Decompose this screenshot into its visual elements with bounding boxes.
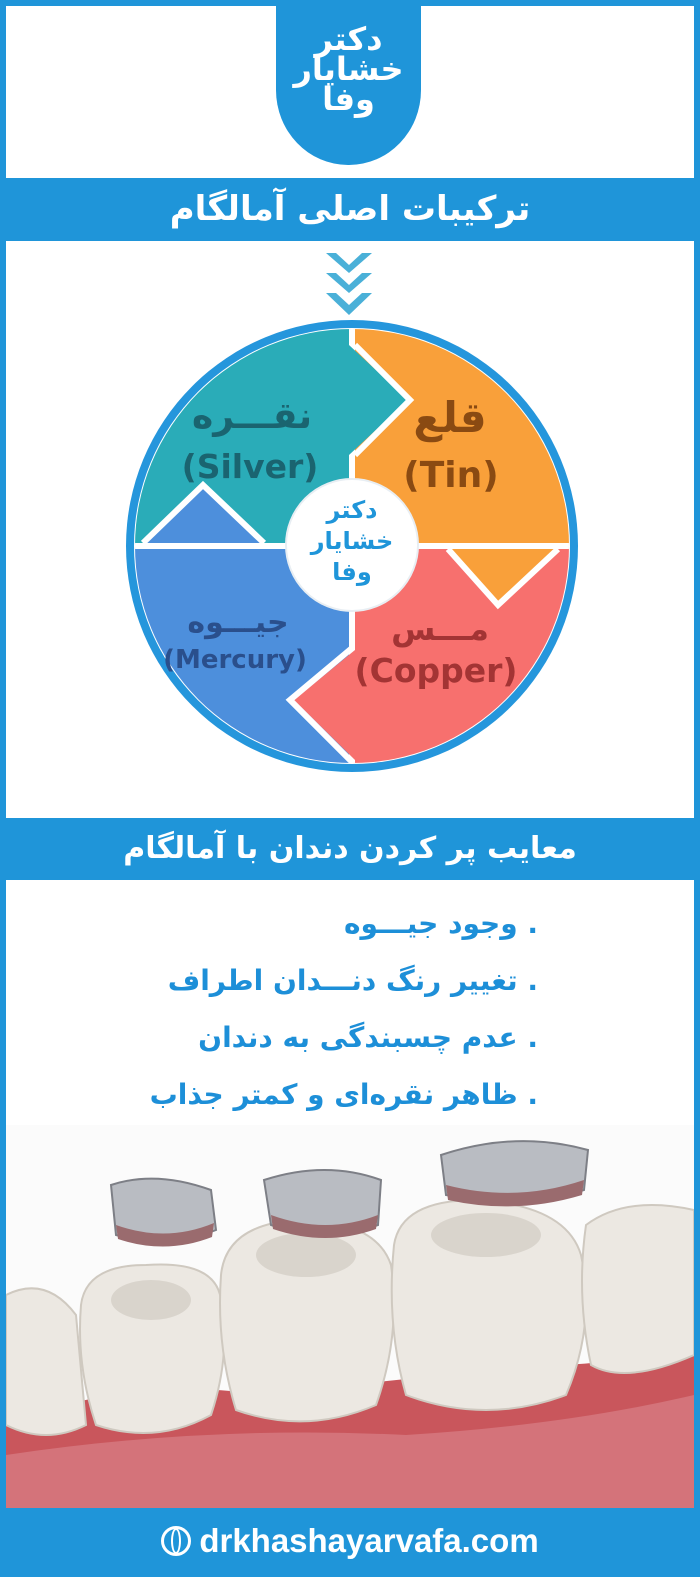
logo tab — [276, 0, 421, 165]
label: copper: (Copper) — [355, 651, 517, 690]
logo tab: خشایار — [293, 50, 404, 88]
footer bar: website: drkhashayarvafa.com — [199, 1522, 539, 1559]
label: tin: قلع — [413, 393, 487, 443]
label: copper — [355, 610, 517, 690]
logo tab: وفا — [322, 80, 375, 118]
label: mercury — [163, 605, 307, 675]
center logo: وفا — [332, 558, 372, 586]
title bar: amalgam composition — [0, 178, 700, 241]
text: drawbacks list: . عدم چسبندگی به دندان — [198, 1021, 538, 1054]
label: tin — [403, 393, 499, 496]
label: silver: نقـــره — [192, 396, 312, 437]
center logo — [286, 479, 418, 611]
title bar: amalgam drawbacks — [0, 818, 700, 880]
icon: globe — [161, 1526, 191, 1556]
footer bar: website — [0, 1508, 700, 1577]
center logo: دکتر — [326, 496, 378, 524]
label: silver: (Silver) — [182, 447, 318, 486]
icon: down chevrons — [326, 253, 372, 315]
label: tin: (Tin) — [403, 455, 499, 496]
label: copper: مـــس — [391, 610, 489, 648]
text: drawbacks list — [150, 907, 538, 1111]
chart: amalgam components circle — [126, 320, 578, 772]
text: drawbacks list: . تغییر رنگ دنـــدان اطراف — [168, 964, 538, 997]
label: mercury: (Mercury) — [163, 645, 307, 675]
label: silver — [182, 396, 318, 486]
text: drawbacks list: . وجود جیـــوه — [344, 907, 538, 940]
text: drawbacks list: . ظاهر نقره‌ای و کمتر جذاب — [150, 1078, 538, 1111]
title bar: amalgam drawbacks: معایب پر کردن دندان با آمالگام — [123, 831, 577, 866]
label: mercury: جیـــوه — [187, 605, 289, 640]
illustration: teeth with amalgam inlays — [6, 1140, 694, 1508]
title bar: amalgam composition: ترکیبات اصلی آمالگام — [170, 189, 530, 229]
logo tab: دکتر — [314, 20, 382, 58]
center logo: خشایار — [310, 527, 393, 555]
